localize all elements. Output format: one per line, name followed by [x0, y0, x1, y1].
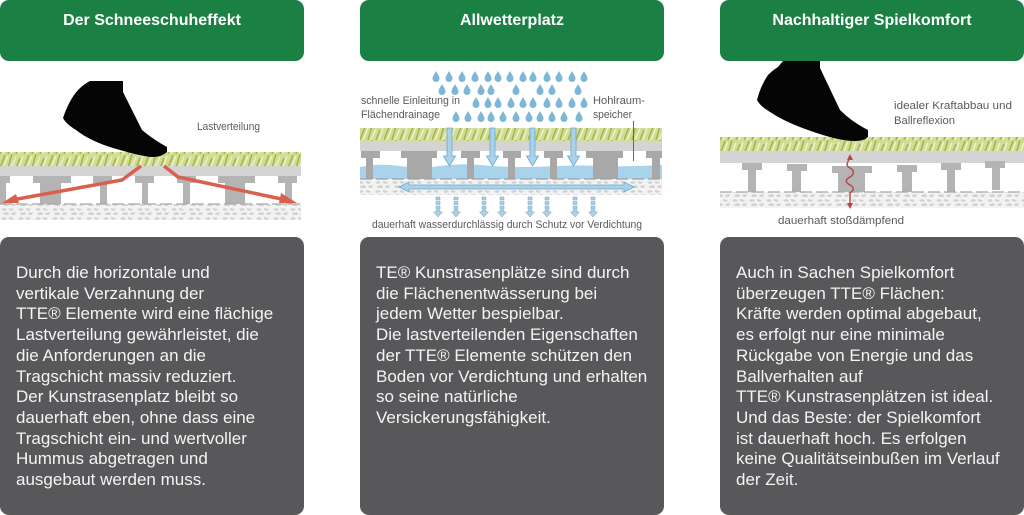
text block: Die lastverteilenden Eigenschaften — [376, 325, 638, 344]
icon: foot — [757, 61, 868, 141]
label: Hohlraumspeicher — [593, 95, 645, 161]
arrow: load spreading left — [2, 166, 141, 203]
icon: foot — [63, 81, 167, 157]
text block — [736, 263, 1000, 489]
text block: ist dauerhaft hoch. Es erfolgen — [736, 429, 967, 448]
text block: Tragschicht ein- und wertvoller — [16, 429, 247, 448]
heading: Allwetterplatz: Allwetterplatz — [460, 12, 564, 29]
label: dauerhaft wasserdurchlässig: dauerhaft wasserdurchlässig durch Schutz vor Verdichtung — [372, 219, 642, 231]
text block: die Flächenentwässerung bei — [376, 284, 597, 303]
illustration: Spielkomfort — [720, 61, 1024, 227]
support slab — [0, 166, 301, 176]
text block: Und das Beste: der Spielkomfort — [736, 408, 981, 427]
text block: jedem Wetter bespielbar. — [376, 304, 564, 323]
text block: überzeugen TTE® Flächen: — [736, 284, 945, 303]
text block: Durch die horizontale und — [16, 263, 210, 282]
support slab — [720, 151, 1024, 163]
label: idealer Kraftabbau: idealer Kraftabbau und — [894, 100, 1012, 112]
gravel base — [0, 204, 301, 220]
illustration: Schneeschuheffekt — [0, 81, 301, 220]
grass layer — [0, 152, 301, 166]
arrow: horizontal water flow — [399, 182, 634, 192]
T-shaped elements — [0, 176, 297, 204]
text block: keine Qualitätseinbußen im Verlauf — [736, 449, 1000, 468]
label: schnelle Einleitung: Flächendrainage — [361, 109, 440, 121]
grass layer — [720, 137, 1024, 151]
illustration: Allwetterplatz — [360, 71, 662, 231]
heading: Nachhaltiger Spielkomfort — [720, 0, 1024, 61]
text block: Versickerungsfähigkeit. — [376, 408, 551, 427]
text block: dauerhaft eben, ohne dass eine — [16, 408, 255, 427]
text block: es erfolgt nur eine minimale — [736, 325, 945, 344]
text block: TTE® Elemente wird eine flächige — [16, 304, 273, 323]
grass layer — [360, 128, 662, 141]
text block: TTE® Kunstrasenplätzen ist ideal. — [736, 387, 993, 406]
illustrations — [0, 61, 1024, 231]
gravel base — [720, 192, 1024, 208]
heading: Allwetterplatz — [360, 0, 664, 61]
text block: die Anforderungen an die — [16, 346, 206, 365]
label: dauerhaft stoßdämpfend: dauerhaft stoßdämpfend — [778, 215, 904, 227]
text block: der TTE® Elemente schützen den — [376, 346, 632, 365]
text block: TE® Kunstrasenplätze sind durch — [376, 263, 630, 282]
text block — [376, 263, 647, 427]
text block: Auch in Sachen Spielkomfort — [736, 263, 954, 282]
panel: Schneeschuheffekt text — [0, 237, 304, 515]
heading: Der Schneeschuheffekt: Der Schneeschuheffekt — [63, 12, 241, 29]
support slab — [360, 141, 662, 151]
panel: Spielkomfort text — [720, 237, 1024, 515]
label: Hohlraumspeicher: Hohlraum- — [593, 95, 645, 107]
text block: Kräfte werden optimal abgebaut, — [736, 304, 982, 323]
text block — [16, 263, 273, 489]
label: Hohlraumspeicher: speicher — [593, 109, 632, 121]
text block: Boden vor Verdichtung und erhalten — [376, 367, 647, 386]
text block: der Zeit. — [736, 470, 798, 489]
label: Lastverteilung: Lastverteilung — [197, 121, 260, 133]
arrows: seepage — [434, 197, 598, 217]
text block: so seine natürliche — [376, 387, 518, 406]
arrows: vertical drainage — [444, 128, 580, 166]
heading: Der Schneeschuheffekt — [0, 0, 304, 61]
arrow: load spreading right — [164, 166, 297, 203]
text block: Tragschicht massiv reduziert. — [16, 367, 236, 386]
text block: Lastverteilung gewährleistet, die — [16, 325, 259, 344]
T-shaped elements — [361, 151, 662, 179]
water storage layer — [360, 164, 662, 179]
label: schnelle Einleitung: schnelle Einleitung in — [361, 95, 460, 107]
text block: vertikale Verzahnung der — [16, 284, 204, 303]
text block: Der Kunstrasenplatz bleibt so — [16, 387, 238, 406]
gravel base — [360, 179, 662, 195]
heading: Nachhaltiger Spielkomfort: Nachhaltiger Spielkomfort — [772, 12, 972, 29]
text block: Rückgabe von Energie und das — [736, 346, 973, 365]
label: idealer Kraftabbau: Ballreflexion — [894, 115, 955, 127]
label: idealer Kraftabbau — [894, 100, 1012, 127]
panel: Allwetterplatz text — [360, 237, 664, 515]
text block: Ballverhalten auf — [736, 367, 863, 386]
T-shaped elements — [742, 161, 1005, 192]
text block: Hummus abgetragen und — [16, 449, 208, 468]
arrow: shock absorption — [846, 154, 853, 209]
label: schnelle Einleitung — [361, 95, 460, 121]
rain drops — [432, 71, 588, 122]
text block: ausgebaut werden muss. — [16, 470, 206, 489]
